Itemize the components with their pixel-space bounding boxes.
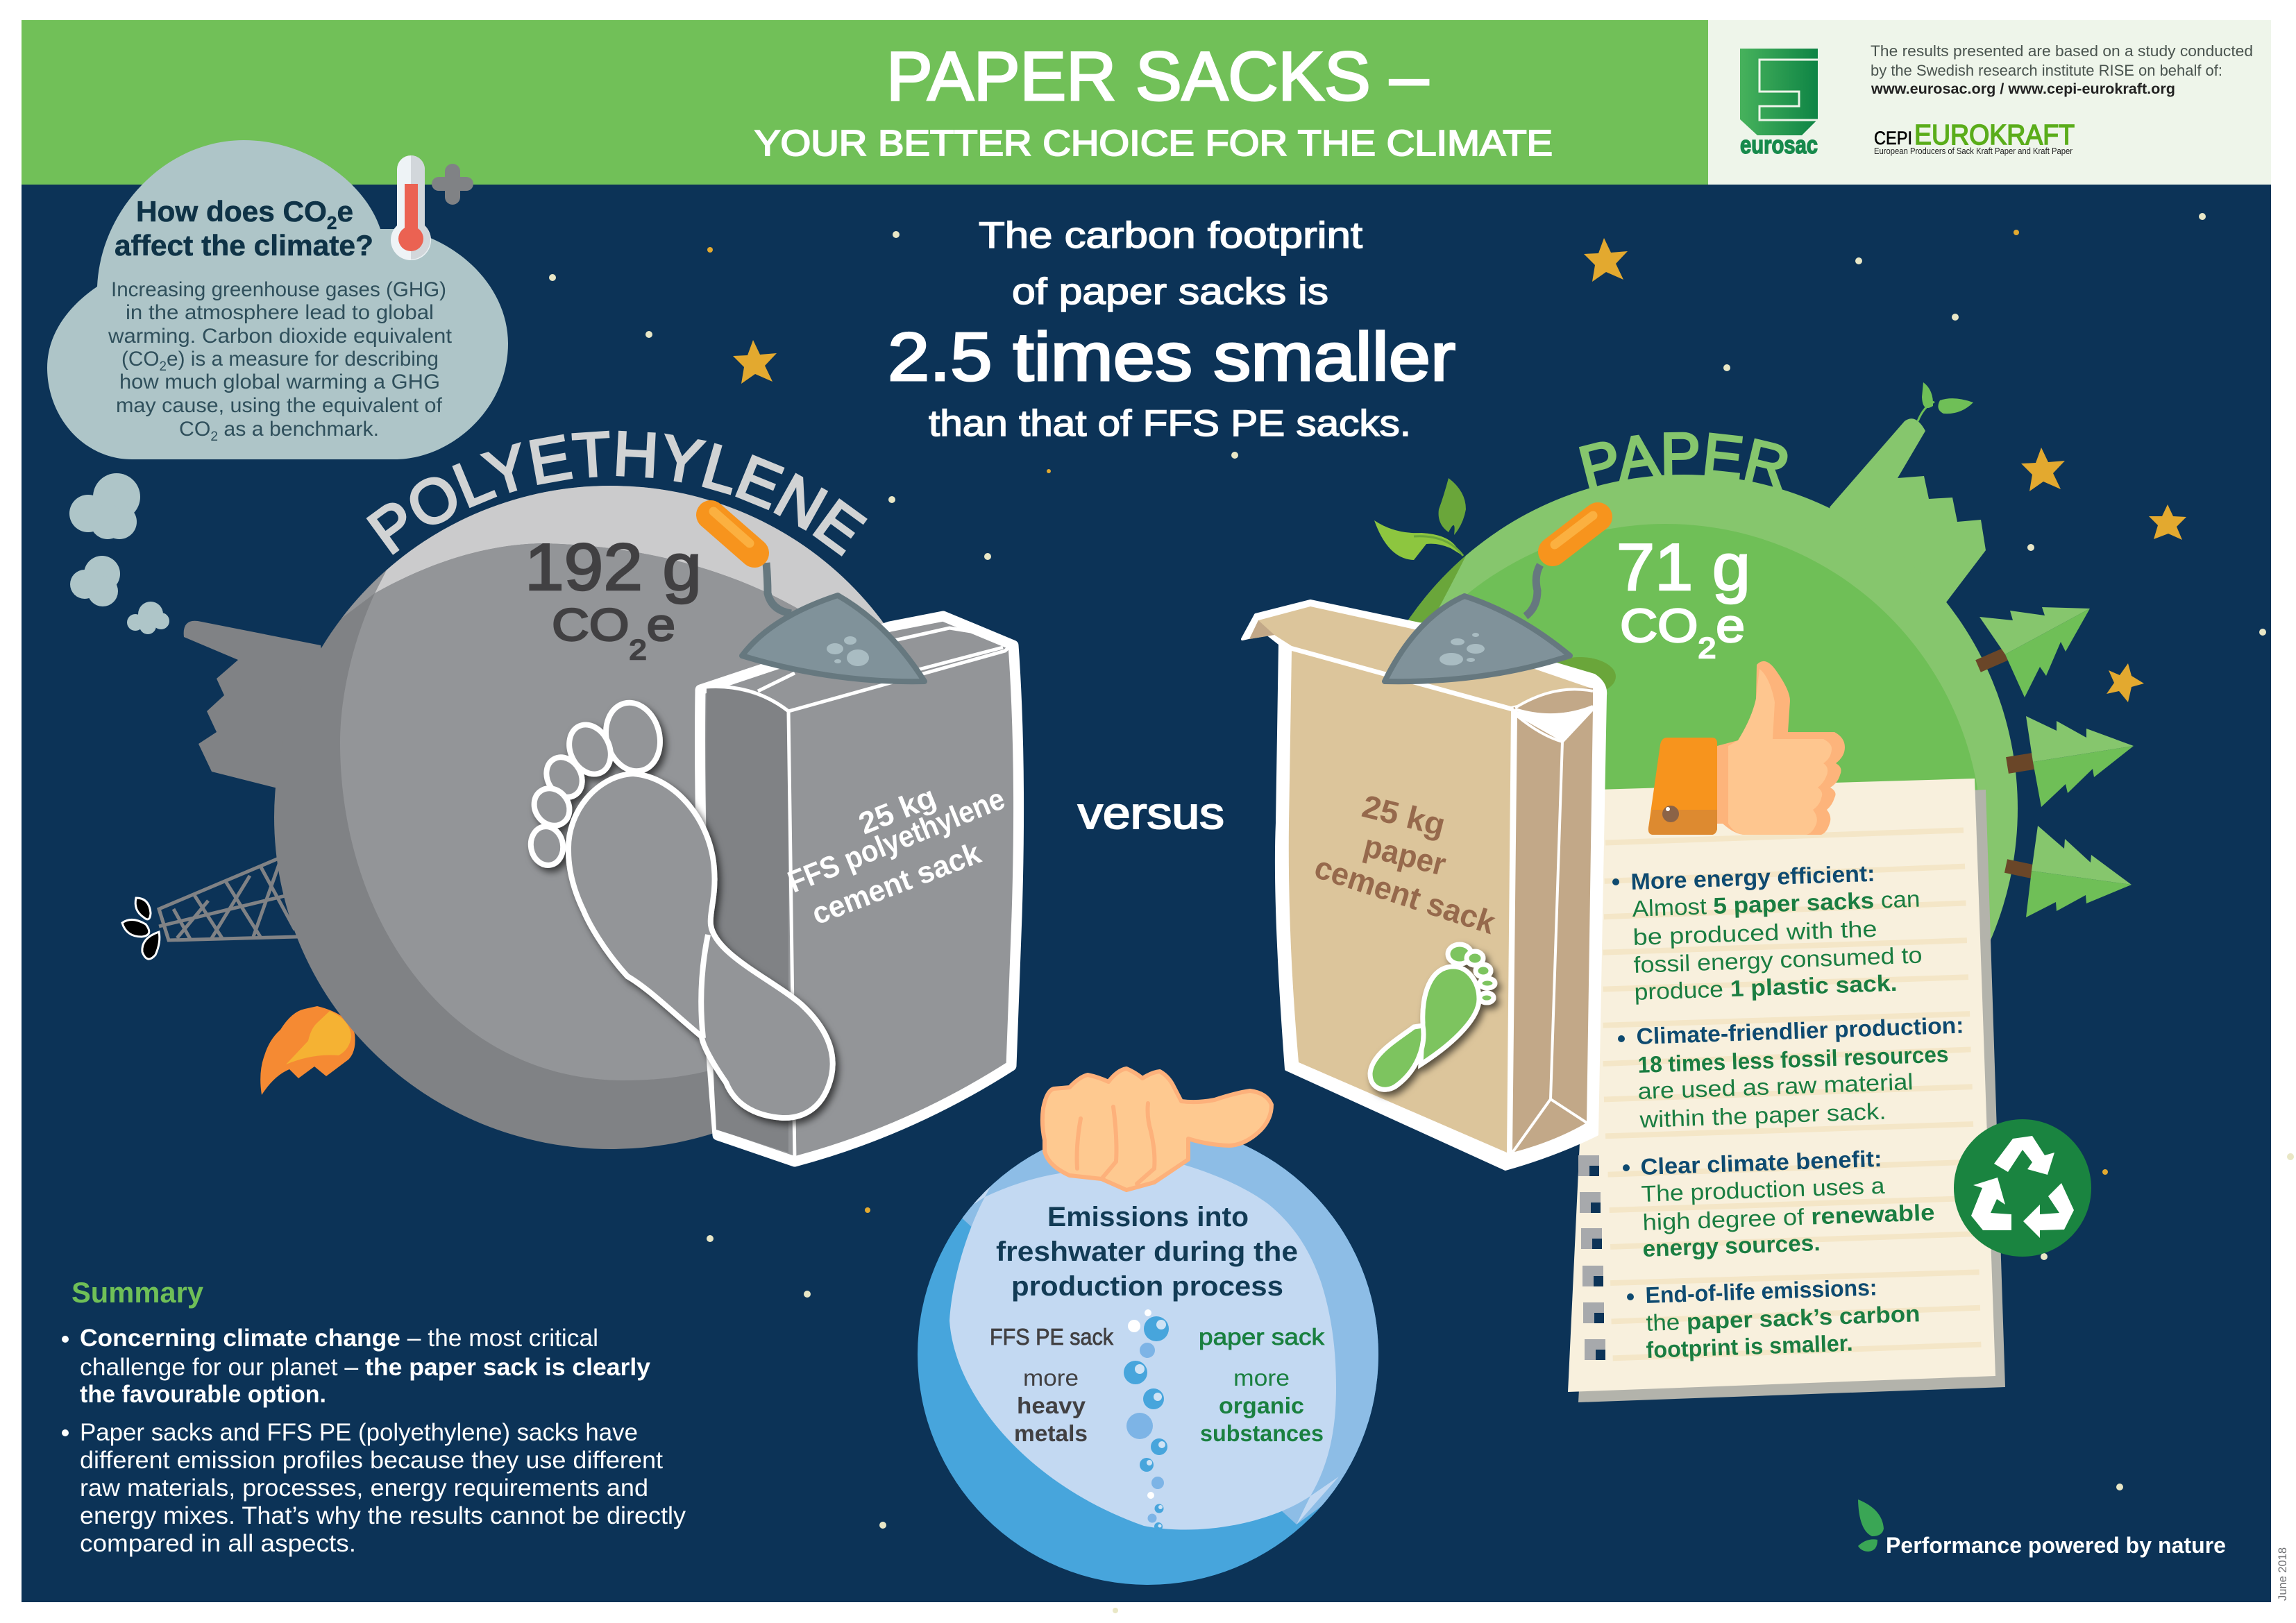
polyethylene counterpart: paper value: 2 — [1698, 631, 1716, 664]
polyethylene counterpart: paper value — [1617, 530, 1750, 664]
tree upper — [1978, 607, 2090, 697]
tagline: Performance powered by nature — [1886, 1533, 2226, 1558]
summary heading: Summary — [71, 1276, 204, 1309]
benefit: end-of-life emissions: the paper sack’s carbon — [1646, 1300, 1921, 1336]
paper sack column — [1199, 1324, 1325, 1446]
central headline: 2.5 times smaller — [888, 318, 1455, 395]
large grey footprint — [527, 697, 833, 1118]
polyethylene counterpart: paper value: CO — [1620, 600, 1691, 652]
benefit: more energy efficient — [1612, 860, 1923, 1005]
benefit: more energy efficient: produce 1 plastic sack. — [1634, 970, 1898, 1005]
green footprint — [1370, 944, 1495, 1089]
note paper — [1568, 779, 2005, 1402]
date note: June 2018 — [2276, 1547, 2289, 1601]
stars and dots — [549, 213, 2294, 1613]
paper sack column: paper sack — [1199, 1324, 1325, 1350]
bubble heading: Emissions into — [1047, 1202, 1249, 1232]
summary point one: the favourable option. — [80, 1381, 326, 1408]
summary point two: different emission profiles because they use different — [80, 1447, 663, 1474]
paper factory and chimney — [1830, 382, 1986, 624]
trowel on paper sack — [1385, 516, 1598, 681]
cloud heading: e — [337, 195, 353, 228]
cloud body text: warming. Carbon dioxide equivalent — [108, 325, 453, 348]
central headline: of paper sacks is — [1012, 271, 1328, 312]
benefit: clear climate benefit: Clear climate benefit: — [1640, 1146, 1882, 1180]
header info panel — [1708, 20, 2271, 185]
trowel on polyethylene sack — [711, 511, 925, 681]
paper sack label: cement sack — [1310, 849, 1500, 941]
paper sack label: 25 kg — [1359, 788, 1449, 843]
summary point two: compared in all aspects. — [80, 1530, 356, 1557]
benefit: climate-friendlier production: Climate-friendlier production: — [1636, 1012, 1964, 1049]
FFS PE sack column: FFS PE sack — [990, 1324, 1113, 1350]
paper sack column: substances — [1200, 1420, 1324, 1446]
FFS PE sack column: metals — [1014, 1420, 1088, 1446]
cloud heading: affect the climate? — [115, 229, 373, 262]
bubble heading: freshwater during the — [996, 1237, 1298, 1267]
sack label: FFS polyethylene — [783, 781, 1010, 899]
cloud body text: (CO — [121, 348, 160, 371]
benefit: end-of-life emissions — [1627, 1274, 1921, 1363]
summary point one — [62, 1325, 651, 1408]
polyethylene value: 192 g — [525, 530, 702, 604]
trees — [1978, 607, 2134, 917]
oil derrick — [122, 858, 298, 959]
benefit: more energy efficient: be produced with the — [1632, 916, 1877, 950]
paper sack column: organic — [1219, 1393, 1304, 1418]
cloud body text — [108, 278, 453, 444]
cloud body text: CO — [179, 418, 210, 441]
cloud body text: may cause, using the equivalent of — [116, 394, 443, 417]
cloud body text: e) is a measure for describing — [167, 348, 439, 371]
FFS PE sack column: more — [1023, 1365, 1079, 1391]
benefit: climate-friendlier production: within the paper sack. — [1639, 1098, 1886, 1132]
study note: The results presented are based on a study conducted — [1871, 42, 2253, 60]
icon: plus sign — [432, 164, 473, 205]
polyethylene sack — [700, 616, 1019, 1162]
central headline: than that of FFS PE sacks. — [929, 403, 1411, 444]
cloud heading: How does CO — [136, 195, 326, 228]
paper sack label: paper — [1360, 827, 1450, 883]
cloud heading: 2 — [327, 212, 337, 233]
icon: flame — [260, 1006, 355, 1095]
cloud body text: in the atmosphere lead to global — [126, 301, 434, 324]
summary panel — [62, 1276, 686, 1557]
chimney sprout — [1918, 382, 1973, 421]
info cloud: how does CO2e affect the climate — [47, 140, 508, 459]
benefit: clear climate benefit: The production uses a — [1641, 1173, 1886, 1207]
polyethylene value: 2 — [630, 635, 647, 665]
binder holes — [1578, 1155, 1605, 1360]
icon: thermometer — [391, 155, 431, 260]
summary point two — [62, 1419, 686, 1557]
cepi eurokraft logo: EUROKRAFT — [1914, 119, 2075, 151]
benefit: more energy efficient: Almost 5 paper sacks can — [1632, 886, 1921, 921]
subtitle: YOUR BETTER CHOICE FOR THE CLIMATE — [754, 124, 1553, 164]
water bubble globe — [916, 1110, 1388, 1589]
bubble heading: production process — [1011, 1271, 1283, 1302]
polyethylene value — [525, 530, 702, 665]
polyethylene label: POLYETHYLENE — [366, 430, 868, 556]
eurosac logo — [1740, 49, 1818, 159]
polyethylene value: CO — [552, 599, 621, 650]
paper sack label — [1310, 788, 1500, 941]
paper label: PAPER — [1578, 432, 1788, 490]
tree middle — [2007, 716, 2134, 807]
sack gusset side — [1512, 688, 1593, 1153]
benefit: climate-friendlier production — [1618, 1012, 1964, 1132]
benefit: clear climate benefit: energy sources. — [1642, 1230, 1821, 1261]
polyethylene globe — [274, 486, 884, 1149]
study note — [1871, 42, 2253, 97]
cloud body text: Increasing greenhouse gases (GHG) — [111, 278, 446, 301]
sack label: 25 kg — [854, 780, 940, 841]
seedling on globe — [1374, 478, 1466, 560]
eurosac logo: eurosac — [1740, 130, 1818, 159]
cloud body text: 2 — [210, 430, 218, 444]
benefit: end-of-life emissions: footprint is smaller. — [1646, 1330, 1853, 1363]
FFS PE sack column — [990, 1324, 1113, 1446]
cepi eurokraft logo: CEPI — [1874, 128, 1912, 148]
benefit: more energy efficient: fossil energy consumed to — [1633, 942, 1923, 978]
sack flap — [1249, 606, 1592, 706]
oil drops — [122, 898, 160, 959]
paper sack — [1242, 601, 1605, 1169]
icon: fist holding globe — [1043, 1069, 1272, 1190]
benefit: clear climate benefit: high degree of renewable — [1642, 1199, 1935, 1235]
FFS PE sack column: heavy — [1017, 1393, 1086, 1418]
main title: PAPER SACKS – — [886, 37, 1429, 114]
sack front — [1289, 651, 1511, 1153]
green globe — [1408, 475, 2018, 940]
polyethylene counterpart: paper value: e — [1716, 600, 1745, 652]
benefit: clear climate benefit — [1623, 1146, 1935, 1261]
study note: by the Swedish research institute RISE on behalf of: — [1871, 62, 2222, 79]
cepi eurokraft logo — [1874, 119, 2075, 156]
summary point two: Paper sacks and FFS PE (polyethylene) sacks have — [80, 1419, 638, 1446]
icon: recycling badge — [1954, 1119, 2091, 1257]
sack label: cement sack — [807, 836, 986, 931]
benefit: end-of-life emissions: End-of-life emissions: — [1645, 1274, 1877, 1308]
bubble heading — [996, 1202, 1298, 1302]
polyethylene value: e — [647, 599, 675, 650]
cloud body text: 2 — [160, 359, 167, 374]
paper sack column: more — [1233, 1365, 1290, 1391]
cloud body text: as a benchmark. — [218, 418, 379, 441]
icon: brand leaf — [1858, 1499, 1884, 1552]
shirt cuff — [1648, 738, 1717, 835]
central headline: The carbon footprint — [979, 215, 1362, 256]
cloud heading — [115, 195, 373, 262]
header banner — [22, 20, 1708, 185]
cepi eurokraft logo: European Producers of Sack Kraft Paper and Kraft Paper — [1874, 146, 2073, 156]
benefit: climate-friendlier production: 18 times less fossil resources — [1637, 1041, 1949, 1078]
cloud body text: how much global warming a GHG — [119, 371, 440, 393]
summary point two: raw materials, processes, energy requirements and — [80, 1475, 648, 1502]
rising bubbles — [1124, 1309, 1169, 1531]
summary point two: energy mixes. That’s why the results cannot be directly — [80, 1502, 686, 1529]
polyethylene smoke clouds — [69, 473, 169, 634]
study note: www.eurosac.org / www.cepi-eurokraft.org — [1871, 81, 2175, 97]
summary point one: challenge for our planet – the paper sack is clearly — [80, 1354, 651, 1381]
summary point one: Concerning climate change – the most critical — [80, 1325, 598, 1352]
benefit: more energy efficient: More energy efficient: — [1630, 860, 1875, 894]
versus label: versus — [1078, 788, 1224, 838]
benefit: climate-friendlier production: are used as raw material — [1637, 1069, 1914, 1104]
polyethylene factory silhouette — [184, 621, 361, 902]
polyethylene counterpart: paper value: 71 g — [1617, 530, 1750, 604]
tree lower — [2006, 826, 2132, 917]
central headline — [888, 215, 1455, 444]
icon: thumbs up — [1648, 661, 1845, 835]
